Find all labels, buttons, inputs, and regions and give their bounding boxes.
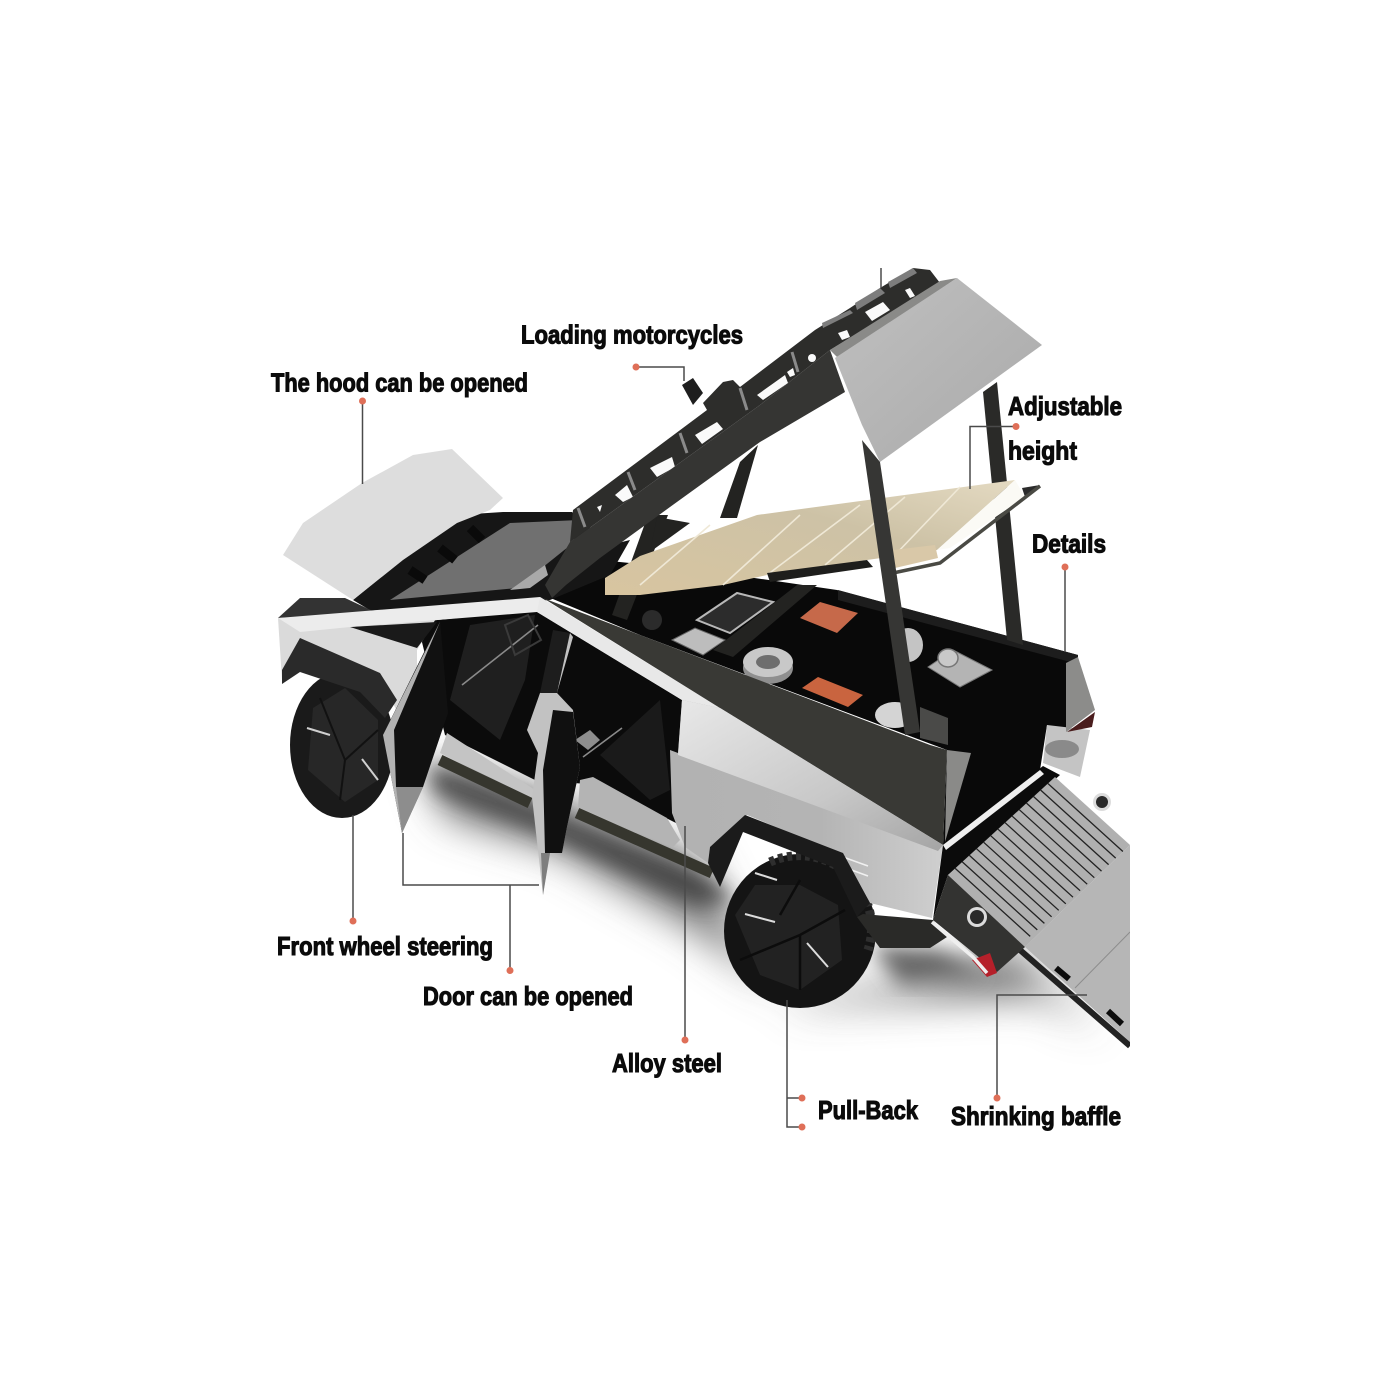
- front upright post: [862, 440, 920, 735]
- screw upper: [1093, 793, 1111, 811]
- hinge block: [933, 875, 1025, 972]
- dark underbody: [440, 760, 712, 873]
- silver grille: [672, 628, 725, 655]
- infographic canvas: [270, 268, 1130, 1131]
- seats and interior trim: [450, 615, 670, 800]
- folded top flap: [830, 278, 1042, 462]
- screw lower: [967, 907, 987, 927]
- rear pillar side face: [945, 750, 971, 842]
- rear wheel: [724, 854, 876, 1008]
- rear sill: [578, 777, 680, 847]
- lattice backing: [570, 268, 940, 542]
- lattice braces: [578, 352, 798, 527]
- nose dark top: [278, 598, 375, 618]
- callout: hood: [271, 368, 528, 484]
- rack struts: [612, 445, 817, 657]
- front door: [383, 620, 448, 833]
- rear wheel arch: [708, 815, 870, 917]
- callout: adjustable height: [970, 391, 1122, 489]
- opened hood: [283, 449, 503, 600]
- callout: front wheel steering: Front wheel steering: [277, 931, 493, 961]
- callout: adjustable height: height: [1008, 436, 1077, 466]
- bed accessories: [642, 593, 992, 728]
- front sill: [440, 733, 535, 798]
- callout: door can be opened: Door can be opened: [423, 981, 633, 1011]
- callout: alloy steel: [612, 826, 722, 1078]
- roof band: [278, 597, 682, 700]
- lattice openings: [597, 288, 915, 512]
- dark bed side panel: [543, 598, 947, 845]
- rear upright post: [983, 382, 1023, 645]
- ground shadow: [425, 760, 1100, 1030]
- callout: pull-back: Pull-Back: [818, 1095, 918, 1125]
- callout: details: Details: [1032, 528, 1106, 558]
- white trim: [932, 922, 987, 973]
- ramp side edge: [1020, 950, 1130, 1046]
- adjustable shelf: [605, 480, 1040, 595]
- loading rack: [545, 268, 940, 598]
- lattice top faces: [822, 268, 917, 328]
- nose silver panel: [278, 610, 440, 712]
- dark knob: [642, 610, 662, 630]
- square bracket knob: [928, 649, 992, 687]
- taillight assembly: [933, 657, 1095, 920]
- callout: pull-back: [787, 1000, 918, 1130]
- callout: door can be opened: [403, 833, 633, 1011]
- cab interior: [417, 610, 682, 825]
- callout: shrinking baffle: Shrinking baffle: [951, 1101, 1121, 1131]
- main rail: [545, 350, 845, 598]
- red light: [972, 953, 997, 977]
- callout: loading motorcycles: Loading motorcycles: [521, 320, 743, 350]
- ramp flat section: [1025, 845, 1130, 1042]
- ramp grooved section: [948, 777, 1130, 947]
- silver cap rear: [904, 628, 923, 662]
- callout: adjustable height: Adjustable: [1008, 391, 1122, 421]
- orange pad front: [802, 677, 863, 707]
- front wheel: [290, 672, 394, 818]
- windshield and roof: [353, 512, 630, 612]
- callout: details: [1032, 528, 1106, 652]
- connector block: [682, 378, 703, 405]
- quarter window: [350, 622, 437, 648]
- truck illustration: [278, 268, 1130, 1046]
- orange pad rear: [800, 602, 858, 633]
- silver cap front: [875, 702, 904, 728]
- front wheel arch: [282, 638, 397, 718]
- rear door: [527, 630, 580, 895]
- callout: loading motorcycles: [521, 320, 743, 381]
- rear chassis: [857, 914, 947, 948]
- tailgate ramp: [932, 777, 1130, 1046]
- ramp notches: [1056, 968, 1122, 1024]
- cargo bed interior: [548, 560, 1078, 845]
- display tray: [697, 593, 773, 633]
- black gap behind ramp: [933, 766, 1060, 920]
- callout: hood: The hood can be opened: [271, 368, 528, 398]
- callout: alloy steel: Alloy steel: [612, 1048, 722, 1078]
- silver cylinder: [743, 647, 793, 684]
- callout: shrinking baffle: [951, 995, 1121, 1131]
- callout: top tick: [880, 268, 882, 288]
- silver rear quarter: [670, 700, 943, 918]
- callout: front wheel steering: [277, 815, 493, 961]
